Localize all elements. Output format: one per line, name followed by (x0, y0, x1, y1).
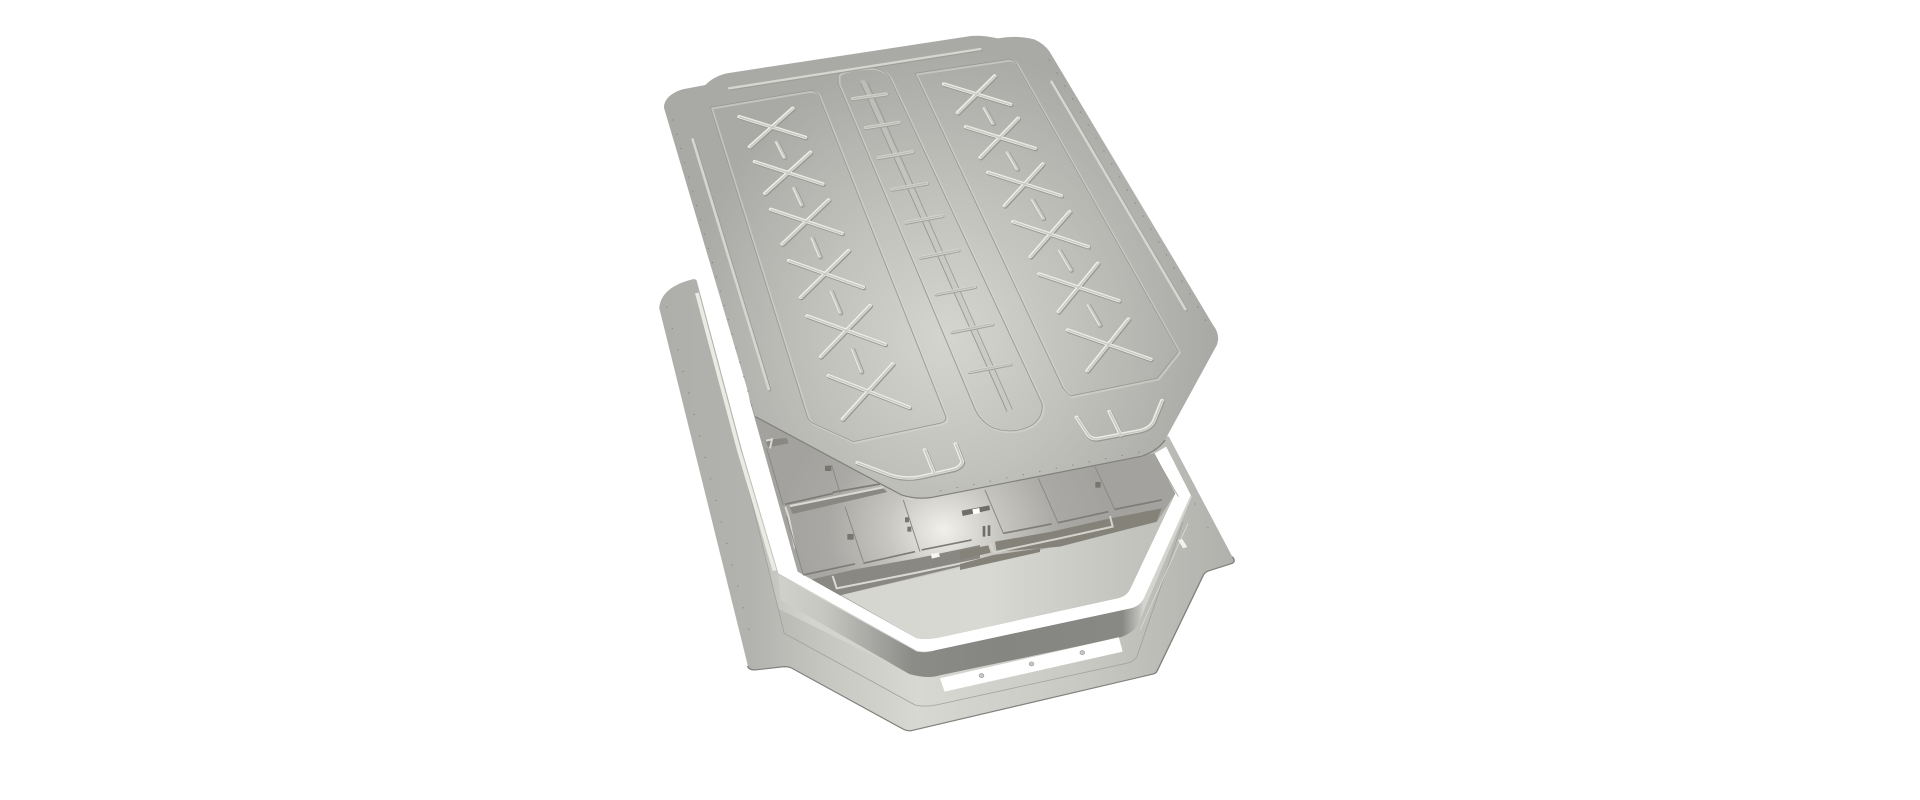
right thin rails (1003, 500, 1162, 533)
flange hatch detail (1178, 539, 1187, 548)
central connector highlight (972, 508, 980, 514)
left squares (825, 466, 911, 540)
flange second line (1140, 523, 1188, 630)
left separators (767, 448, 920, 575)
upper lid panel (664, 36, 1218, 498)
lid lower edge shadow (755, 417, 1165, 498)
central spine (861, 82, 1012, 411)
vertical pins (983, 525, 990, 537)
small ribs (776, 108, 1100, 372)
white rim (694, 250, 1191, 651)
central cross bars (853, 94, 1010, 372)
right flange rivets (1195, 504, 1208, 528)
square connector (1095, 482, 1101, 488)
plate holes (979, 651, 1085, 678)
right rails light (990, 516, 1113, 552)
lower tray (659, 250, 1234, 731)
right channels (960, 508, 1162, 570)
white mounting plate (940, 637, 1123, 692)
central dark connector (962, 505, 990, 516)
tray flange lower shadow edge (748, 557, 1234, 731)
module bay (750, 400, 1175, 639)
left thin rails (785, 484, 972, 575)
tray side wall (778, 575, 1145, 677)
bay floor (809, 493, 1175, 639)
flange rivets (667, 307, 749, 630)
white clip (931, 553, 940, 559)
long side ribs (693, 49, 1186, 390)
battery modules right half (960, 467, 1162, 570)
flange stamped line (741, 457, 1183, 706)
rim inner thin line (1157, 460, 1178, 497)
raised crosses and u-shaped ribs (739, 76, 1163, 479)
lid rivets (673, 60, 1208, 494)
tray outer shoulder (741, 437, 1192, 677)
lid body (664, 36, 1218, 498)
cream strip beside rim (697, 293, 775, 571)
left channels (765, 438, 980, 595)
battery modules left half (765, 438, 980, 595)
right separators (985, 467, 1115, 533)
tray flange (659, 279, 1234, 731)
left rails light (766, 439, 980, 588)
stamped pockets (710, 59, 1180, 443)
